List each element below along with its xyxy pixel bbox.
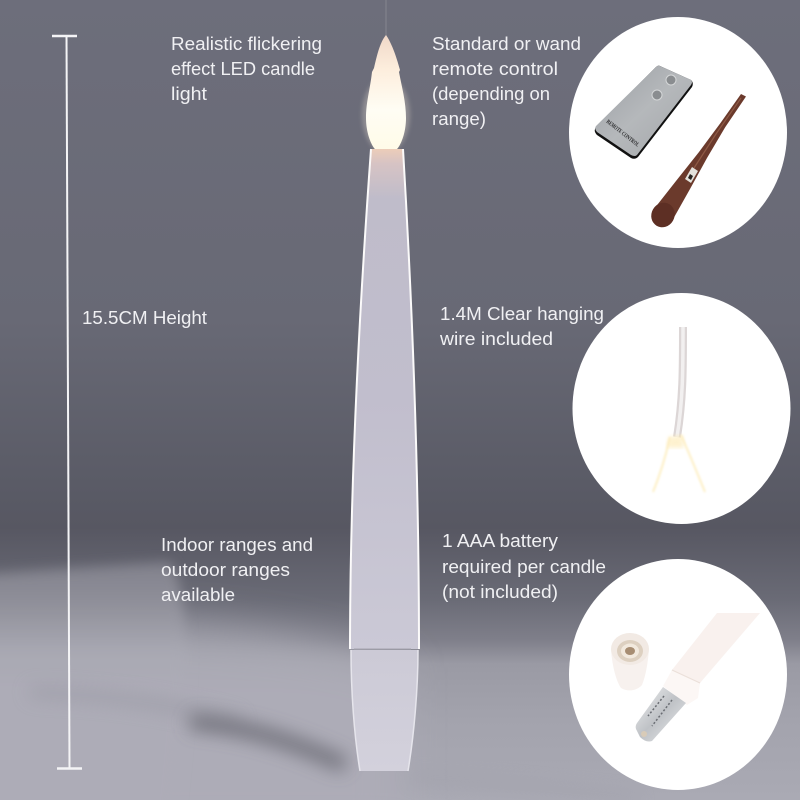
background: studio wall and floor: [0, 431, 800, 800]
icon: remote control: [595, 66, 693, 159]
text: ranges: outdoor ranges: [161, 560, 290, 580]
height measurement line: [52, 35, 82, 768]
text: flickering effect: light: [171, 84, 207, 104]
text: flickering effect: [171, 34, 322, 104]
text: hanging wire: 1.4M Clear hanging: [440, 304, 604, 324]
text: ranges: available: [161, 585, 235, 605]
text: remote control: Standard or wand: [432, 34, 581, 54]
icon: clear wire: [677, 327, 683, 437]
candle flame: [366, 35, 406, 150]
text: hanging wire: [439, 304, 604, 349]
candle: [350, 0, 419, 771]
icon: flame tip: [653, 435, 705, 492]
text: flickering effect: effect LED candle: [171, 59, 315, 79]
text: battery: required per candle: [442, 557, 606, 577]
text: remote control: [432, 34, 581, 129]
text: flickering effect: Realistic flickering: [171, 34, 322, 54]
icon: wand: [647, 94, 746, 232]
candle base: [351, 650, 418, 771]
icon: end cap with spring: [611, 633, 649, 690]
text: hanging wire: wire included: [439, 329, 553, 349]
text: remote control: range): [432, 109, 486, 129]
text: battery: [442, 531, 606, 602]
text: ranges: Indoor ranges and: [161, 535, 313, 555]
panel: battery: [569, 559, 787, 790]
text: height: 15.5CM Height: [82, 308, 207, 328]
text: remote control: remote control: [432, 59, 558, 79]
text: remote control: (depending on: [432, 84, 550, 104]
hanging wire: [385, 0, 387, 38]
icon: AAA battery: [636, 687, 686, 742]
text: ranges: [161, 535, 313, 605]
panel: remote and wand: [569, 17, 787, 248]
panel: hanging wire: [572, 293, 790, 524]
icon: remote control: REMOTE CONTROL: [605, 119, 640, 148]
icon: candle tube: [672, 613, 760, 683]
text: battery: (not included): [442, 582, 558, 602]
text: battery: 1 AAA battery: [442, 531, 558, 551]
candle body: [350, 149, 419, 649]
candle glow: [362, 77, 410, 153]
candle edge highlights: [350, 149, 419, 649]
